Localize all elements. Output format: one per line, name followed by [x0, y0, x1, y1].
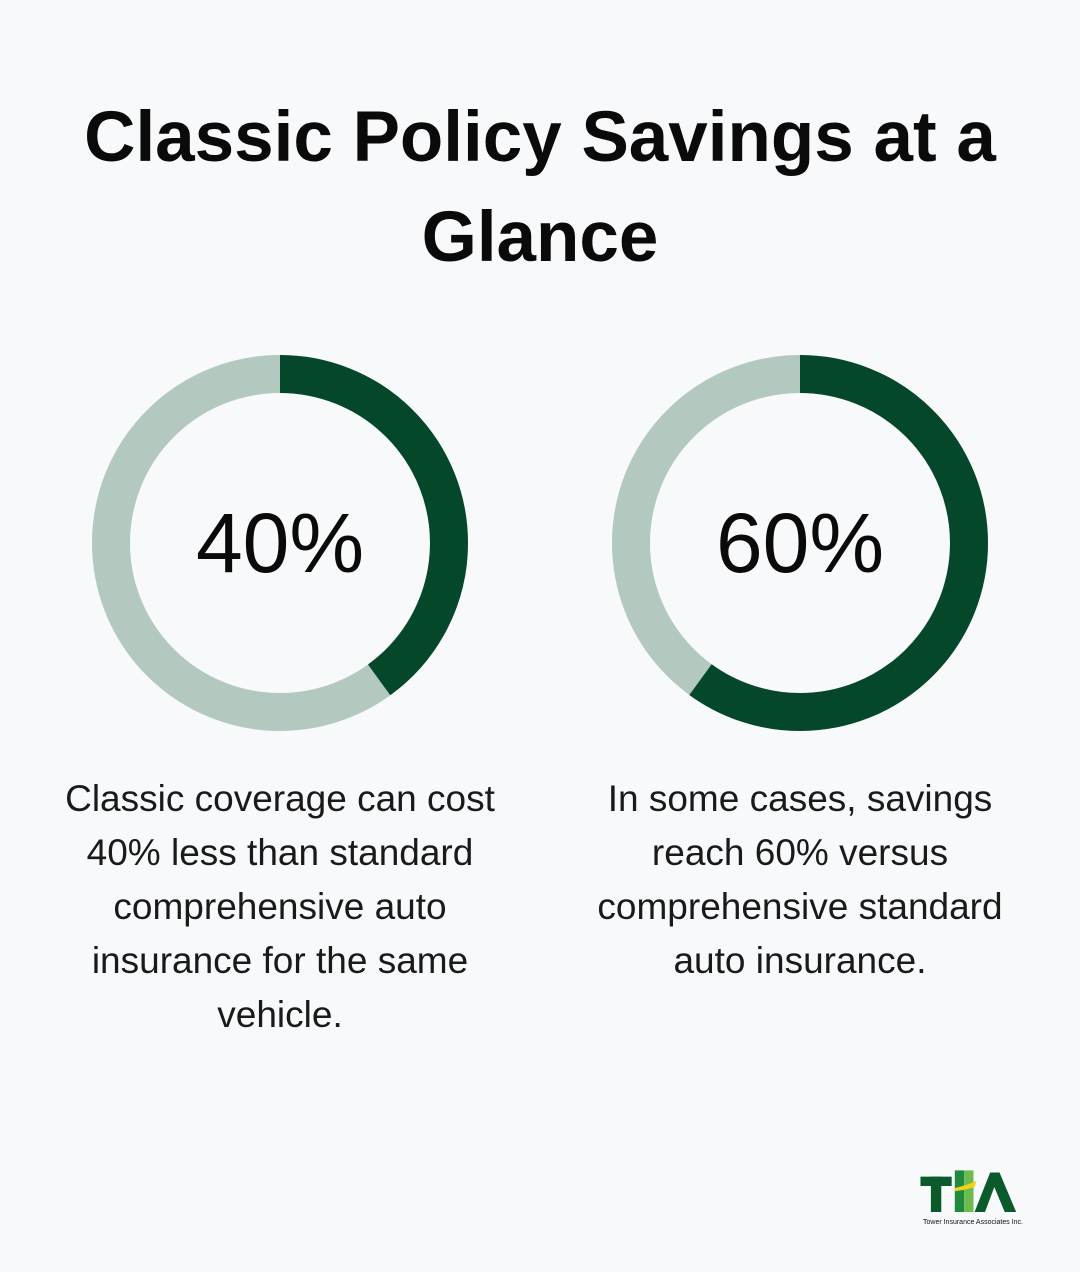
text: left description: Classic coverage can cost 40% less than standard comprehensive auto insurance for the same vehicle.	[65, 778, 495, 1035]
logo	[920, 1170, 1023, 1226]
donut chart: 40%: 40%	[196, 496, 364, 590]
title	[84, 98, 996, 277]
donut chart: 60%	[612, 355, 988, 731]
donut chart: 40%	[92, 355, 468, 731]
donut chart: 60%: 60%	[716, 496, 884, 590]
logo: Tower Insurance Associates Inc.	[923, 1219, 1023, 1226]
text: right description: In some cases, savings reach 60% versus comprehensive standard auto insurance.	[597, 778, 1003, 981]
title: Classic Policy Savings at a	[84, 98, 996, 177]
title: Glance	[422, 198, 658, 277]
